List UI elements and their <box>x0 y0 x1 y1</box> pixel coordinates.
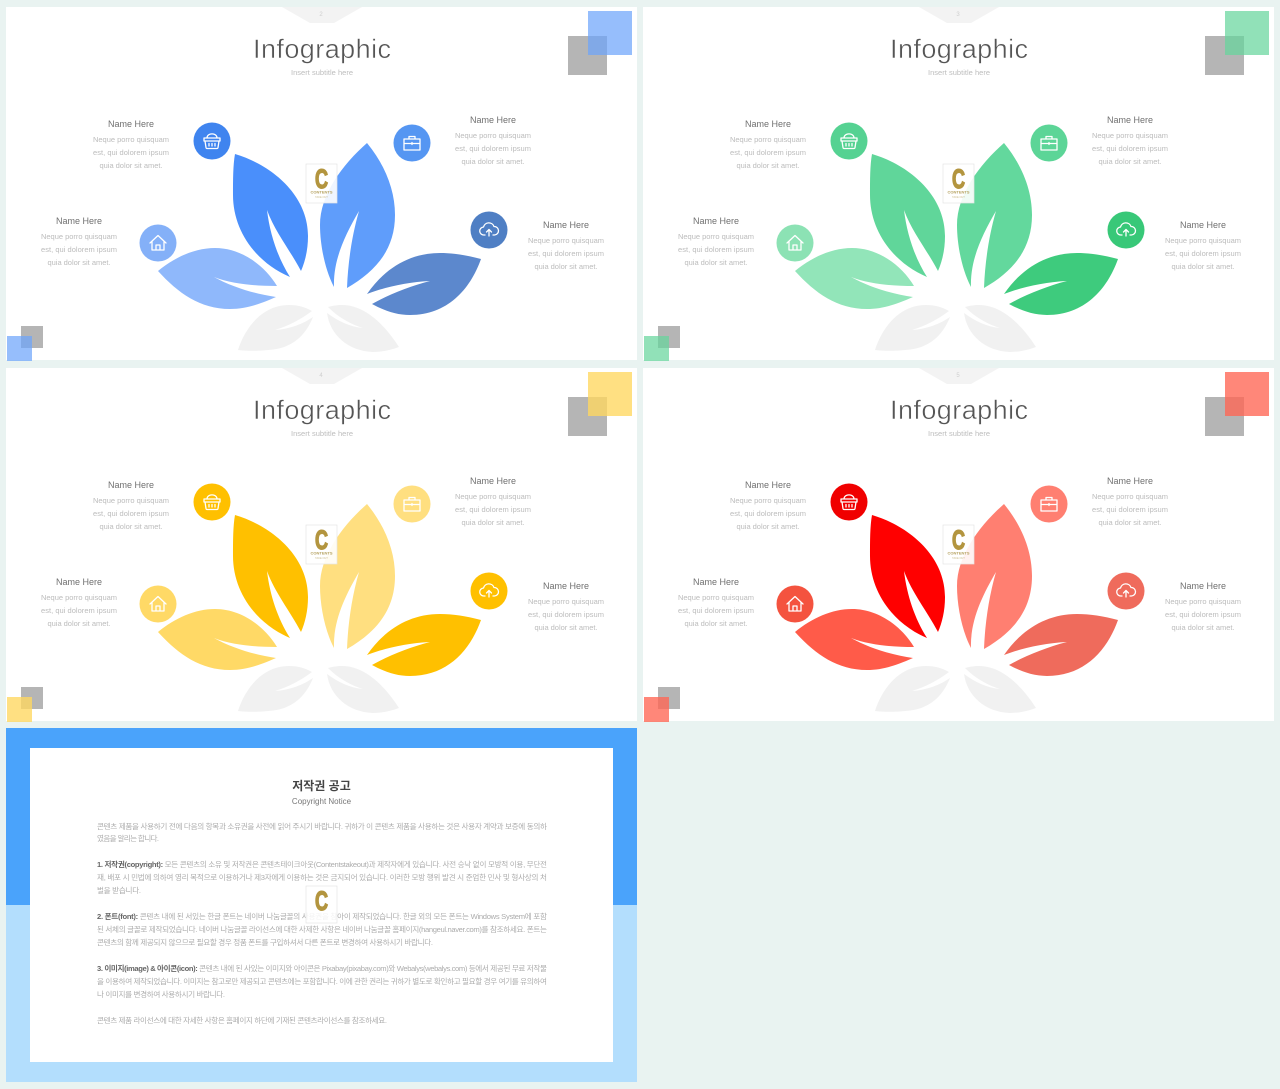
bottom left decorative squares <box>644 326 680 361</box>
text block: name top right: quia dolor sit amet. <box>462 157 524 166</box>
section 1: copyright <box>97 859 547 895</box>
logo: CONTENTS <box>310 190 333 194</box>
page number tab <box>919 7 999 23</box>
text block: name lower left: Name Here <box>693 216 739 226</box>
slide panel: blue infographic <box>6 7 637 361</box>
logo: C <box>952 525 965 555</box>
text block: name top left: est, qui dolorem ipsum <box>730 509 806 518</box>
text block: name top right: est, qui dolorem ipsum <box>455 505 531 514</box>
icon: briefcase <box>1030 124 1068 162</box>
leaf chart: petals <box>158 504 481 713</box>
section 3: image and icon <box>97 963 547 999</box>
text block: name top left: Neque porro quisquam <box>730 496 806 505</box>
logo <box>943 525 974 564</box>
page number tab: 3 <box>956 12 960 18</box>
section 2: font <box>97 911 547 947</box>
icon: house <box>776 224 814 262</box>
text block: name lower left: Neque porro quisquam <box>41 232 117 241</box>
text block: name top left: Neque porro quisquam <box>93 496 169 505</box>
panel: copyright notice <box>6 728 637 1082</box>
icon: house <box>140 224 176 262</box>
text block: name lower left <box>41 216 117 267</box>
text block: name lower right: quia dolor sit amet. <box>1172 623 1234 632</box>
text block: name top left: quia dolor sit amet. <box>736 522 800 531</box>
logo: C <box>315 886 328 916</box>
icon: cloud upload <box>1108 212 1144 248</box>
text block: name lower right: Name Here <box>1180 220 1226 230</box>
section 2: font: 2. 폰트(font): 콘텐츠 내에 된 서있는 한글 폰트는 네이버 나눔글꼴의 사용권을 참아이 제작되었습니다. 한글 외의 모든 폰트는 Windows System에 포함 <box>97 911 547 921</box>
page number tab <box>282 368 362 384</box>
leaf chart: petals <box>158 143 481 352</box>
logo <box>943 164 974 203</box>
logo: TAKE OUT <box>952 195 965 199</box>
section 2: font: 된 서체의 글꼴로 제작되었습니다. 네이버 나눔글꼴 라이선스에 대한 사제한 사항은 네이버 나눔글꼴 홈페이지(hangeul.naver.com)를 참조하세요. 폰트는 <box>97 924 547 934</box>
intro paragraph: 콘텐츠 제품을 사용하기 전에 다음의 항목과 소유권을 사전에 읽어 주시기 바랍니다. 귀하가 이 콘텐츠 제품을 사용하는 것은 사용자 계약과 보증에 동의하 <box>97 821 547 831</box>
text block: name lower left: Neque porro quisquam <box>41 593 117 602</box>
text block: name lower right: Neque porro quisquam <box>528 236 604 245</box>
text block: name lower right: Name Here <box>543 220 589 230</box>
text block: name top right: quia dolor sit amet. <box>1098 157 1162 166</box>
text block: name lower left: quia dolor sit amet. <box>684 258 748 267</box>
text block: name lower right: Name Here <box>543 581 589 591</box>
page number tab <box>919 368 999 384</box>
text block: name lower right <box>528 581 604 632</box>
logo <box>306 164 337 203</box>
text block: name lower right <box>528 220 604 271</box>
text block: name top left: Name Here <box>108 119 154 129</box>
text block: name top left <box>730 480 806 531</box>
logo: CONTENTS <box>310 550 333 556</box>
text block: name lower right: quia dolor sit amet. <box>1172 262 1234 271</box>
section 3: image and icon: 나 이미지를 변경하여 사용하시기 바랍니다. <box>97 989 225 999</box>
text block: name top right: est, qui dolorem ipsum <box>1092 505 1168 514</box>
slide panel: green infographic <box>643 7 1274 361</box>
text block: name top left <box>730 119 806 170</box>
text block: name lower right: quia dolor sit amet. <box>534 623 598 632</box>
text block: name top right <box>1092 476 1168 527</box>
text block: name lower left <box>41 577 117 628</box>
text block: name top left: quia dolor sit amet. <box>736 161 800 170</box>
text block: name top right <box>455 115 531 166</box>
slide panel: yellow infographic <box>6 368 637 722</box>
text block: name lower right: est, qui dolorem ipsum <box>528 249 604 258</box>
bottom left decorative squares <box>7 687 43 722</box>
icon: basket <box>194 122 230 160</box>
text block: name top left <box>93 480 169 531</box>
subtitle: Insert subtitle here <box>291 429 353 438</box>
logo: C <box>315 164 328 194</box>
text block: name top right: Neque porro quisquam <box>455 492 531 501</box>
text block: name top left: Neque porro quisquam <box>93 135 169 144</box>
text block: name top left: quia dolor sit amet. <box>100 522 162 531</box>
logo: TAKE OUT <box>315 556 328 560</box>
text block: name lower left: quia dolor sit amet. <box>684 619 748 628</box>
icon: basket <box>194 484 230 520</box>
text block: name top right: Name Here <box>470 115 516 125</box>
text block: name top right: Neque porro quisquam <box>455 131 531 140</box>
icon: cloud upload <box>1108 572 1144 610</box>
closing line: 콘텐츠 제품 라이선스에 대한 자세한 사항은 홈페이지 하단에 기재된 콘텐츠라이선스를 참조하세요. <box>97 1015 387 1025</box>
text block: name top right: est, qui dolorem ipsum <box>455 144 531 153</box>
text block: name top left: est, qui dolorem ipsum <box>93 148 169 157</box>
top right decorative squares <box>1205 372 1269 436</box>
text block: name lower left: Neque porro quisquam <box>678 593 754 602</box>
icon: basket <box>830 122 868 160</box>
text block: name top left <box>93 119 169 170</box>
copyright subheading: Copyright Notice <box>292 797 352 806</box>
section 1: copyright: 재, 배포 시 민법에 의하여 영리 목적으로 이용하거나 제3자에게 이용하는 것은 금지되어 있습니다. 이러한 모방 행위 발견 시 준엄한 민사 및 형사상의 처 <box>97 872 547 882</box>
leaf chart: petals <box>795 504 1118 713</box>
text block: name lower right: Neque porro quisquam <box>1165 236 1241 245</box>
logo: CONTENTS <box>948 190 970 194</box>
slide panel: red infographic <box>643 368 1274 722</box>
section 3: image and icon: 3. 이미지(image) & 아이콘(icon): 콘텐츠 내에 된 사있는 이미지와 아이콘은 Pixabay(pixabay.com)와 Webalys(webalys.com) 등에서 제공된 무료 저작물 <box>97 963 547 973</box>
section 3: image and icon: 을 이용하여 제작되었습니다. 이미지는 참고로만 제공되고 콘텐츠에는 포함합니다. 이에 관한 권리는 귀하가 별도로 확인하고 필요할 경우 여기를 유의하여 <box>97 976 547 986</box>
icon: cloud upload <box>470 572 508 610</box>
leaf chart: petals <box>795 143 1118 352</box>
text block: name lower right: quia dolor sit amet. <box>534 262 598 271</box>
text block: name top right: quia dolor sit amet. <box>1098 518 1162 527</box>
text block: name top left: quia dolor sit amet. <box>100 161 162 170</box>
page number tab: 4 <box>319 373 323 379</box>
icon: basket <box>830 484 868 520</box>
top right decorative squares <box>568 11 632 75</box>
text block: name lower right: est, qui dolorem ipsum <box>1165 249 1241 258</box>
text block: name lower left <box>678 216 754 267</box>
text block: name top left: est, qui dolorem ipsum <box>93 509 169 518</box>
page number tab: 2 <box>319 12 323 18</box>
top right decorative squares <box>568 372 632 436</box>
icon: cloud upload <box>470 212 508 248</box>
intro paragraph <box>97 821 547 843</box>
section 1: copyright: 벌을 받습니다. <box>97 885 141 895</box>
text block: name top right: est, qui dolorem ipsum <box>1092 144 1168 153</box>
text block: name top right: Neque porro quisquam <box>1092 131 1168 140</box>
icon: house <box>140 586 176 622</box>
text block: name lower left: est, qui dolorem ipsum <box>678 606 754 615</box>
logo: TAKE OUT <box>952 556 965 560</box>
icon: briefcase <box>394 486 430 522</box>
logo <box>306 886 337 923</box>
subtitle: Insert subtitle here <box>291 68 353 77</box>
logo: C <box>952 164 965 194</box>
text block: name lower left: est, qui dolorem ipsum <box>41 606 117 615</box>
subtitle: Insert subtitle here <box>928 429 990 438</box>
text block: name top left: Name Here <box>745 119 791 129</box>
text block: name lower left: quia dolor sit amet. <box>48 619 110 628</box>
text block: name top right <box>455 476 531 527</box>
text block: name lower right <box>1165 220 1241 271</box>
text block: name lower right: est, qui dolorem ipsum <box>528 610 604 619</box>
text block: name lower left: est, qui dolorem ipsum <box>678 245 754 254</box>
text block: name lower left <box>678 577 754 628</box>
text block: name lower right: Neque porro quisquam <box>1165 597 1241 606</box>
text block: name lower right: Name Here <box>1180 581 1226 591</box>
bottom left decorative squares <box>644 687 680 722</box>
title: Infographic <box>890 34 1028 64</box>
text block: name top left: est, qui dolorem ipsum <box>730 148 806 157</box>
text block: name top left: Name Here <box>745 480 791 490</box>
text block: name top right: Neque porro quisquam <box>1092 492 1168 501</box>
text block: name lower right: est, qui dolorem ipsum <box>1165 610 1241 619</box>
page number tab: 5 <box>956 373 960 379</box>
text block: name top left: Name Here <box>108 480 154 490</box>
logo <box>306 525 337 564</box>
text block: name top right <box>1092 115 1168 166</box>
bottom left decorative squares <box>7 326 43 361</box>
text block: name top right: Name Here <box>470 476 516 486</box>
text block: name lower left: est, qui dolorem ipsum <box>41 245 117 254</box>
text block: name top right: Name Here <box>1107 115 1153 125</box>
logo: C <box>315 525 328 555</box>
text block: name lower left: Name Here <box>56 216 102 226</box>
icon: briefcase <box>394 124 430 162</box>
text block: name lower left: Name Here <box>56 577 102 587</box>
subtitle: Insert subtitle here <box>928 68 990 77</box>
text block: name lower right: Neque porro quisquam <box>528 597 604 606</box>
page number tab <box>282 7 362 23</box>
intro paragraph: 였음을 알리는 합니다. <box>97 833 159 843</box>
text block: name lower left: Neque porro quisquam <box>678 232 754 241</box>
title: Infographic <box>253 395 391 425</box>
text block: name top left: Neque porro quisquam <box>730 135 806 144</box>
text block: name lower left: quia dolor sit amet. <box>48 258 110 267</box>
title: Infographic <box>253 34 391 64</box>
logo: TAKE OUT <box>315 195 328 199</box>
section 2: font: 콘텐츠의 함께 제공되지 않으므로 필요할 경우 정품 폰트를 구입하셔서 다른 폰트로 변경하여 사용하시기 바랍니다. <box>97 937 433 947</box>
logo: CONTENTS <box>948 550 970 556</box>
title: Infographic <box>890 395 1028 425</box>
text block: name lower left: Name Here <box>693 577 739 587</box>
top right decorative squares <box>1205 11 1269 75</box>
copyright heading: 저작권 공고 <box>292 778 351 793</box>
icon: house <box>776 586 814 622</box>
section 1: copyright: 1. 저작권(copyright): 모든 콘텐츠의 소유 및 저작권은 콘텐츠테이크아웃(Contentstakeout)과 제작자에게 있습니다. 사전 승낙 없이 모방적 이용, 무단전 <box>97 859 547 869</box>
text block: name lower right <box>1165 581 1241 632</box>
text block: name top right: quia dolor sit amet. <box>462 518 524 527</box>
icon: briefcase <box>1030 486 1068 522</box>
text block: name top right: Name Here <box>1107 476 1153 486</box>
